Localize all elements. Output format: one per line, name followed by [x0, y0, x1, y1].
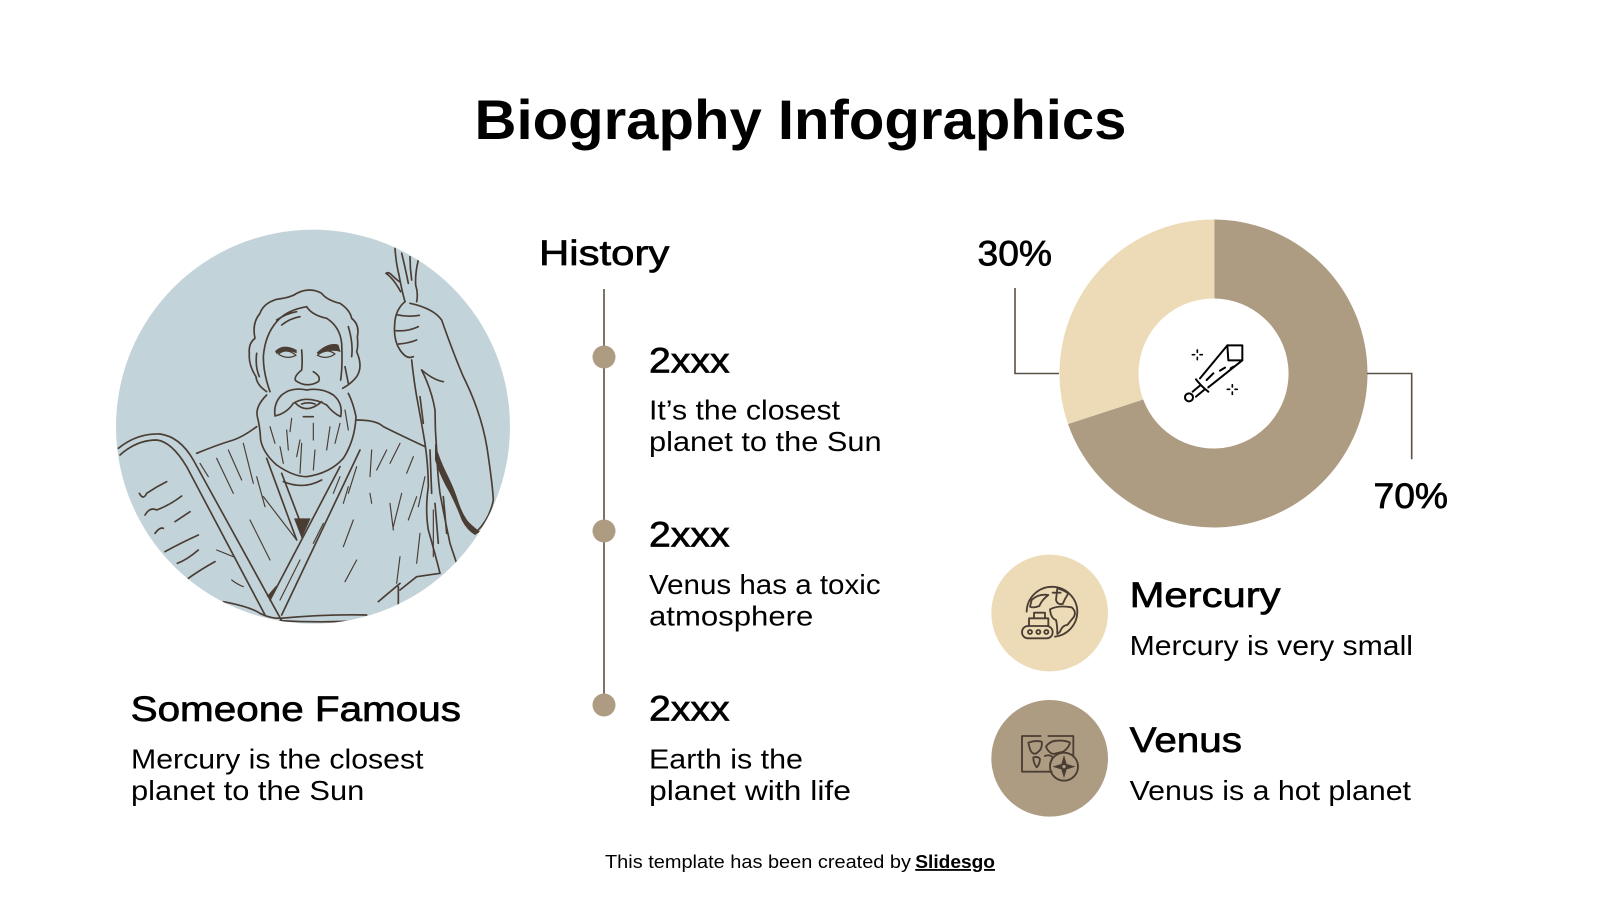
- footer credit: This template has been created by: [605, 851, 912, 872]
- donut chart: [1059, 219, 1367, 527]
- timeline entry 2: Venus has a toxic: [649, 569, 881, 600]
- callout line: 70%: [1367, 374, 1412, 459]
- timeline entry 3: [649, 690, 851, 806]
- panel: portrait illustration: [116, 230, 510, 624]
- description: [131, 743, 424, 806]
- timeline entry 1: [649, 342, 882, 457]
- timeline entry 2: [649, 516, 881, 632]
- icon: globe with tank: [991, 555, 1108, 671]
- segment: 30%: [1059, 219, 1214, 424]
- title: Biography Infographics: [474, 88, 1126, 151]
- heading: mercury: Mercury: [1130, 576, 1281, 615]
- description: mercury: Mercury is very small: [1130, 630, 1413, 661]
- text block: someone famous: [131, 690, 461, 806]
- timeline entry 2: atmosphere: [649, 600, 813, 632]
- timeline dot 1: [592, 346, 616, 368]
- footer credit: Slidesgo: [915, 851, 995, 872]
- segment: 70%: [1068, 220, 1367, 527]
- label: 70%: 70%: [1374, 477, 1448, 516]
- heading: history: History: [539, 234, 670, 273]
- text block: mercury: [1130, 576, 1413, 661]
- timeline entry 1: It’s the closest: [649, 394, 840, 425]
- description: Mercury is the closest: [131, 743, 424, 774]
- heading: venus: Venus: [1130, 721, 1242, 760]
- timeline entry 3: planet with life: [649, 775, 851, 806]
- timeline entry 3: Earth is the: [649, 743, 803, 774]
- timeline: [592, 289, 882, 806]
- text block: venus: [1130, 721, 1411, 806]
- icon: map with compass: [991, 700, 1108, 817]
- timeline entry 2: 2xxx: [649, 516, 730, 555]
- timeline entry 1: 2xxx: [649, 342, 730, 381]
- timeline entry 1: planet to the Sun: [649, 426, 882, 457]
- timeline dot 3: [592, 694, 616, 716]
- description: planet to the Sun: [131, 775, 364, 806]
- timeline dot 2: [592, 520, 616, 542]
- icon: sword: [1185, 345, 1242, 401]
- timeline entry 3: 2xxx: [649, 690, 730, 729]
- heading: someone famous: Someone Famous: [131, 690, 461, 729]
- label: 30%: 30%: [978, 234, 1052, 273]
- callout line: 30%: [1015, 288, 1059, 374]
- description: venus: Venus is a hot planet: [1130, 775, 1411, 806]
